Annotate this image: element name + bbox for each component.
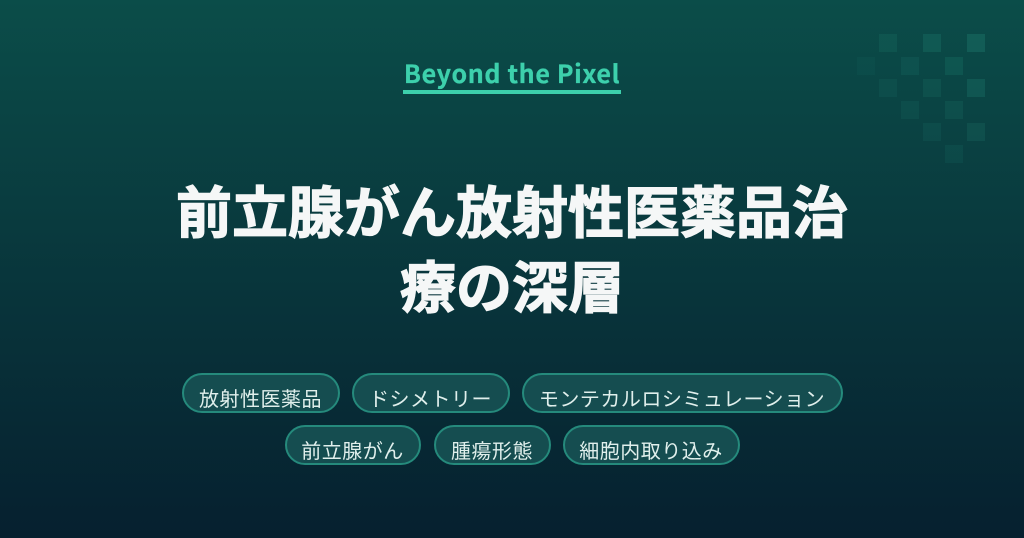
tag: 腫瘍形態 — [434, 425, 551, 465]
tag: 前立腺がん — [285, 425, 421, 465]
tag: 放射性医薬品 — [182, 373, 340, 413]
title: 前立腺がん放射性医薬品治 — [176, 169, 848, 250]
decorative pixel grid — [879, 34, 985, 163]
tag: モンテカルロシミュレーション — [522, 373, 843, 413]
tag: ドシメトリー — [352, 373, 510, 413]
title — [176, 169, 848, 325]
tag: 放射性医薬品: 放射性医薬品 — [199, 383, 322, 412]
tag: ドシメトリー: ドシメトリー — [369, 383, 492, 412]
tag: 前立腺がん: 前立腺がん — [301, 435, 404, 464]
tag: 腫瘍形態: 腫瘍形態 — [451, 435, 533, 464]
tag: モンテカルロシミュレーション: モンテカルロシミュレーション — [539, 383, 825, 412]
brand label: Beyond the Pixel: Beyond the Pixel — [404, 55, 620, 91]
title: 療の深層 — [400, 244, 624, 325]
tag: 細胞内取り込み: 細胞内取り込み — [579, 435, 723, 464]
tag: 細胞内取り込み — [563, 425, 740, 465]
